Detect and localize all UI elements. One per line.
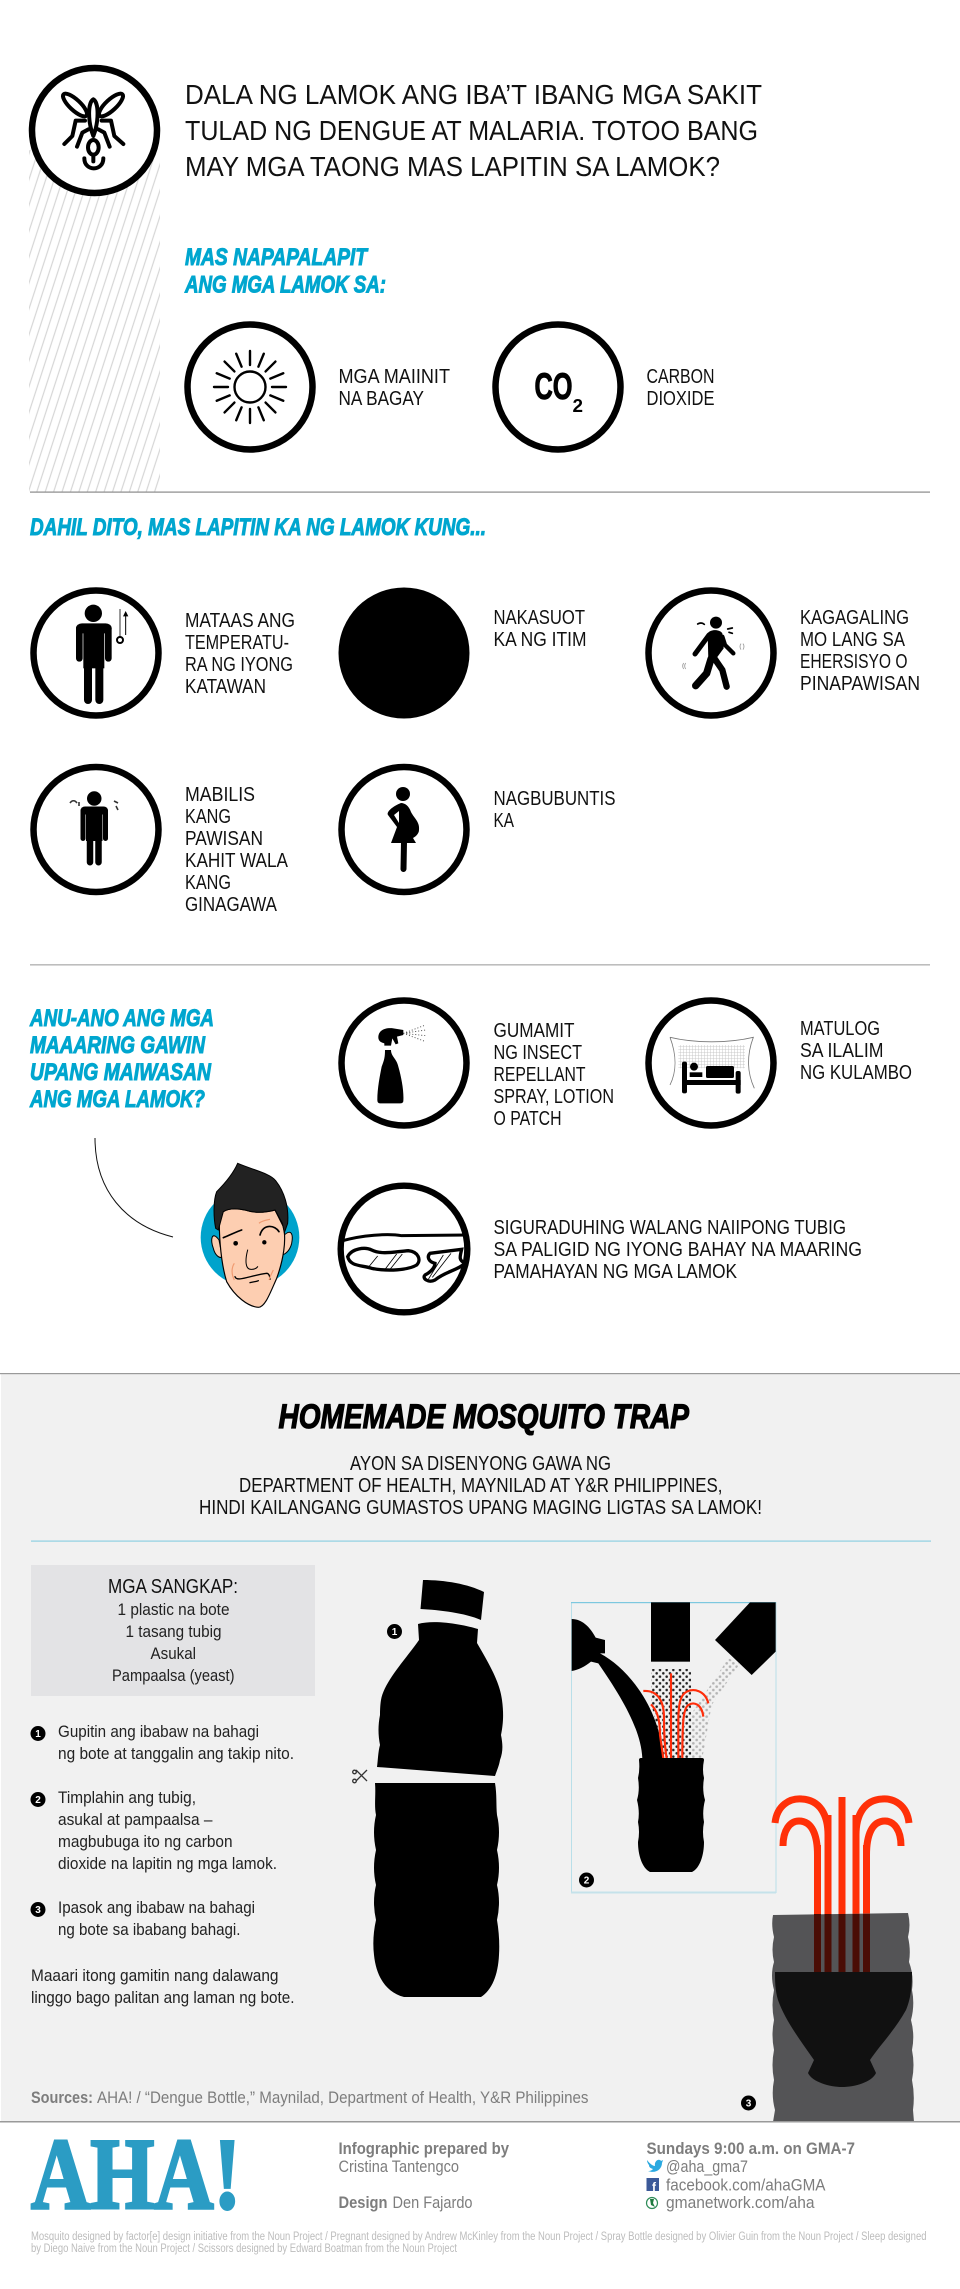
label: after exercise: KAGAGALING (800, 606, 909, 629)
label: carbon dioxide: DIOXIDE (646, 387, 714, 410)
illustration: step 2 assembly (571, 1602, 776, 1894)
label: high temperature: TEMPERATU- (185, 631, 289, 654)
label: after exercise: EHERSISYO O (800, 650, 908, 673)
icon: mosquito (32, 68, 157, 193)
icon attribution: by Diego Naive from the Noun Project / Scissors designed by Edward Boatman from the Noun Project (31, 2243, 458, 2255)
illustration: step 1 bottle cut (373, 1580, 503, 1997)
credits (338, 2139, 509, 2212)
trap intro text: DEPARTMENT OF HEALTH, MAYNILAD AT Y&R PHILIPPINES, (239, 1474, 722, 1497)
illustration: step 2 assembly: 2 (584, 1876, 590, 1886)
label: pregnant: KA (494, 809, 514, 832)
icon: carbon dioxide: CO (534, 366, 572, 407)
icon: scissors (353, 1770, 367, 1783)
icon: globe (646, 2198, 658, 2208)
usage note (31, 1967, 294, 2007)
label: hot things: NA BAGAY (338, 387, 424, 410)
label: no standing water: SA PALIGID NG IYONG BAHAY NA MAARING (494, 1238, 862, 1261)
label: no standing water (494, 1216, 862, 1283)
icon: facebook (646, 2178, 659, 2194)
title: TULAD NG DENGUE AT MALARIA. TOTOO BANG (185, 115, 758, 146)
ingredients box: MGA SANGKAP: (108, 1575, 238, 1598)
heading: what can be done: MAAARING GAWIN (30, 1032, 206, 1059)
heading: what can be done: UPANG MAIWASAN (30, 1059, 212, 1086)
illustration: step 3 finished trap: 3 (746, 2098, 752, 2110)
label: no standing water: SIGURADUHING WALANG NAIIPONG TUBIG (494, 1216, 846, 1239)
ingredients box: 1 plastic na bote (118, 1601, 230, 1619)
step 1: Gupitin ang ibabaw na bahagi (58, 1723, 259, 1741)
label: no standing water: PAMAHAYAN NG MGA LAMOK (494, 1260, 737, 1283)
credits: Den Fajardo (392, 2193, 472, 2212)
label: carbon dioxide: CARBON (646, 365, 714, 388)
step 3 (30, 1899, 255, 1939)
label: pregnant: NAGBUBUNTIS (494, 787, 616, 810)
label: use repellant: SPRAY, LOTION (494, 1085, 614, 1108)
label: use repellant: O PATCH (494, 1107, 562, 1130)
show info: Sundays 9:00 a.m. on GMA-7 (646, 2139, 855, 2158)
step 2: magbubuga ito ng carbon (58, 1833, 232, 1851)
label: sweat easily: KAHIT WALA (185, 849, 288, 872)
icon: carbon dioxide (496, 324, 620, 450)
credits: Infographic prepared by (338, 2139, 509, 2158)
credits: Cristina Tantengco (338, 2157, 459, 2176)
heading: what can be done: ANG MGA LAMOK? (29, 1086, 205, 1113)
icon: twitter (647, 2160, 663, 2172)
label: sweat easily: MABILIS (185, 783, 255, 806)
label: sleep under net (800, 1017, 912, 1084)
label: hot things (338, 365, 450, 410)
icon: walking sweaty person (648, 590, 774, 716)
icon: carbon dioxide: 2 (572, 396, 583, 416)
label: use repellant (494, 1019, 614, 1130)
icon: sun (188, 324, 312, 450)
label: sweat easily: GINAGAWA (185, 893, 277, 916)
trap intro text (199, 1452, 762, 1519)
label: high temperature: RA NG IYONG (185, 653, 293, 676)
label: after exercise (800, 606, 920, 695)
icon: pregnant woman (342, 767, 466, 892)
label: sweat easily (185, 783, 288, 916)
show info: gmanetwork.com/aha (666, 2193, 815, 2212)
label: sweat easily: KANG (185, 805, 231, 828)
panel: homemade mosquito trap (0, 1373, 960, 2122)
AHA! logo: AHA! (31, 2118, 241, 2231)
icon: person with thermometer (34, 590, 158, 716)
ingredients box: 1 tasang tubig (126, 1623, 222, 1641)
icon: facebook: f (652, 2180, 657, 2194)
usage note: linggo bago palitan ang laman ng bote. (31, 1989, 294, 2007)
label: high temperature (185, 609, 295, 698)
sources: AHA! / “Dengue Bottle,” Maynilad, Department of Health, Y&R Philippines (97, 2089, 588, 2107)
label: wearing black: NAKASUOT (494, 606, 585, 629)
heading: what can be done: ANU-ANO ANG MGA (29, 1005, 214, 1032)
heading: attracted to (184, 244, 386, 298)
show info: @aha_gma7 (666, 2157, 748, 2176)
icon: bed under mosquito net (648, 1000, 774, 1126)
heading: you attract more if: DAHIL DITO, MAS LAPITIN KA NG LAMOK KUNG... (30, 514, 486, 541)
step 2: Timplahin ang tubig, (58, 1789, 196, 1807)
step 2: 2 (35, 1795, 41, 1806)
label: high temperature: KATAWAN (185, 675, 266, 698)
ingredients box (31, 1565, 315, 1696)
show info: facebook.com/ahaGMA (666, 2176, 826, 2194)
label: after exercise: PINAPAWISAN (800, 672, 920, 695)
heading: attracted to: MAS NAPAPALAPIT (185, 244, 369, 271)
label: sweat easily: PAWISAN (185, 827, 263, 850)
illustration: step 3 finished trap (741, 1797, 914, 2122)
label: use repellant: REPELLANT (494, 1063, 586, 1086)
label: wearing black: KA NG ITIM (494, 628, 586, 651)
sources: Sources: (31, 2089, 93, 2107)
label: sleep under net: NG KULAMBO (800, 1061, 912, 1084)
trap intro text: AYON SA DISENYONG GAWA NG (350, 1452, 611, 1475)
step 3: Ipasok ang ibabaw na bahagi (58, 1899, 255, 1917)
illustration: step 1 bottle cut: 1 (392, 1627, 398, 1638)
step 3: ng bote sa ibabang bahagi. (58, 1921, 240, 1939)
label: sweat easily: KANG (185, 871, 231, 894)
label: sleep under net: MATULOG (800, 1017, 880, 1040)
credits: Design (338, 2193, 388, 2212)
label: sleep under net: SA ILALIM (800, 1039, 884, 1062)
icon: black circle (338, 588, 470, 718)
icon: sweating person (34, 767, 158, 892)
trap title: HOMEMADE MOSQUITO TRAP (278, 1398, 689, 1436)
trap intro text: HINDI KAILANGANG GUMASTOS UPANG MAGING LIGTAS SA LAMOK! (199, 1496, 762, 1519)
ingredients box: Asukal (150, 1645, 196, 1663)
step 1: 1 (35, 1729, 41, 1740)
icon: worried face (201, 1163, 299, 1307)
title: MAY MGA TAONG MAS LAPITIN SA LAMOK? (185, 151, 720, 182)
label: use repellant: NG INSECT (494, 1041, 582, 1064)
label: after exercise: MO LANG SA (800, 628, 905, 651)
step 3: 3 (35, 1905, 41, 1916)
icon attribution (31, 2231, 926, 2255)
label: carbon dioxide (646, 365, 714, 410)
hatched column background (29, 150, 160, 492)
title: DALA NG LAMOK ANG IBA’T IBANG MGA SAKIT (185, 79, 762, 110)
step 2: asukal at pampaalsa – (58, 1811, 213, 1829)
label: hot things: MGA MAIINIT (338, 365, 450, 388)
icon: spray bottle (342, 1000, 466, 1126)
ingredients box: Pampaalsa (yeast) (112, 1667, 234, 1685)
label: use repellant: GUMAMIT (494, 1019, 575, 1042)
heading: what can be done (29, 1005, 214, 1113)
label: wearing black (494, 606, 586, 651)
heading: attracted to: ANG MGA LAMOK SA: (184, 272, 386, 298)
step 1: ng bote at tanggalin ang takip nito. (58, 1745, 294, 1763)
title (185, 79, 762, 182)
step 2 (30, 1789, 277, 1873)
icon: standing water (341, 1186, 468, 1312)
step 2: dioxide na lapitin ng mga lamok. (58, 1855, 277, 1873)
usage note: Maaari itong gamitin nang dalawang (31, 1967, 278, 1985)
label: high temperature: MATAAS ANG (185, 609, 295, 632)
step 1 (30, 1723, 294, 1763)
speech line (95, 1138, 173, 1237)
show info (646, 2139, 855, 2212)
label: pregnant (494, 787, 616, 832)
